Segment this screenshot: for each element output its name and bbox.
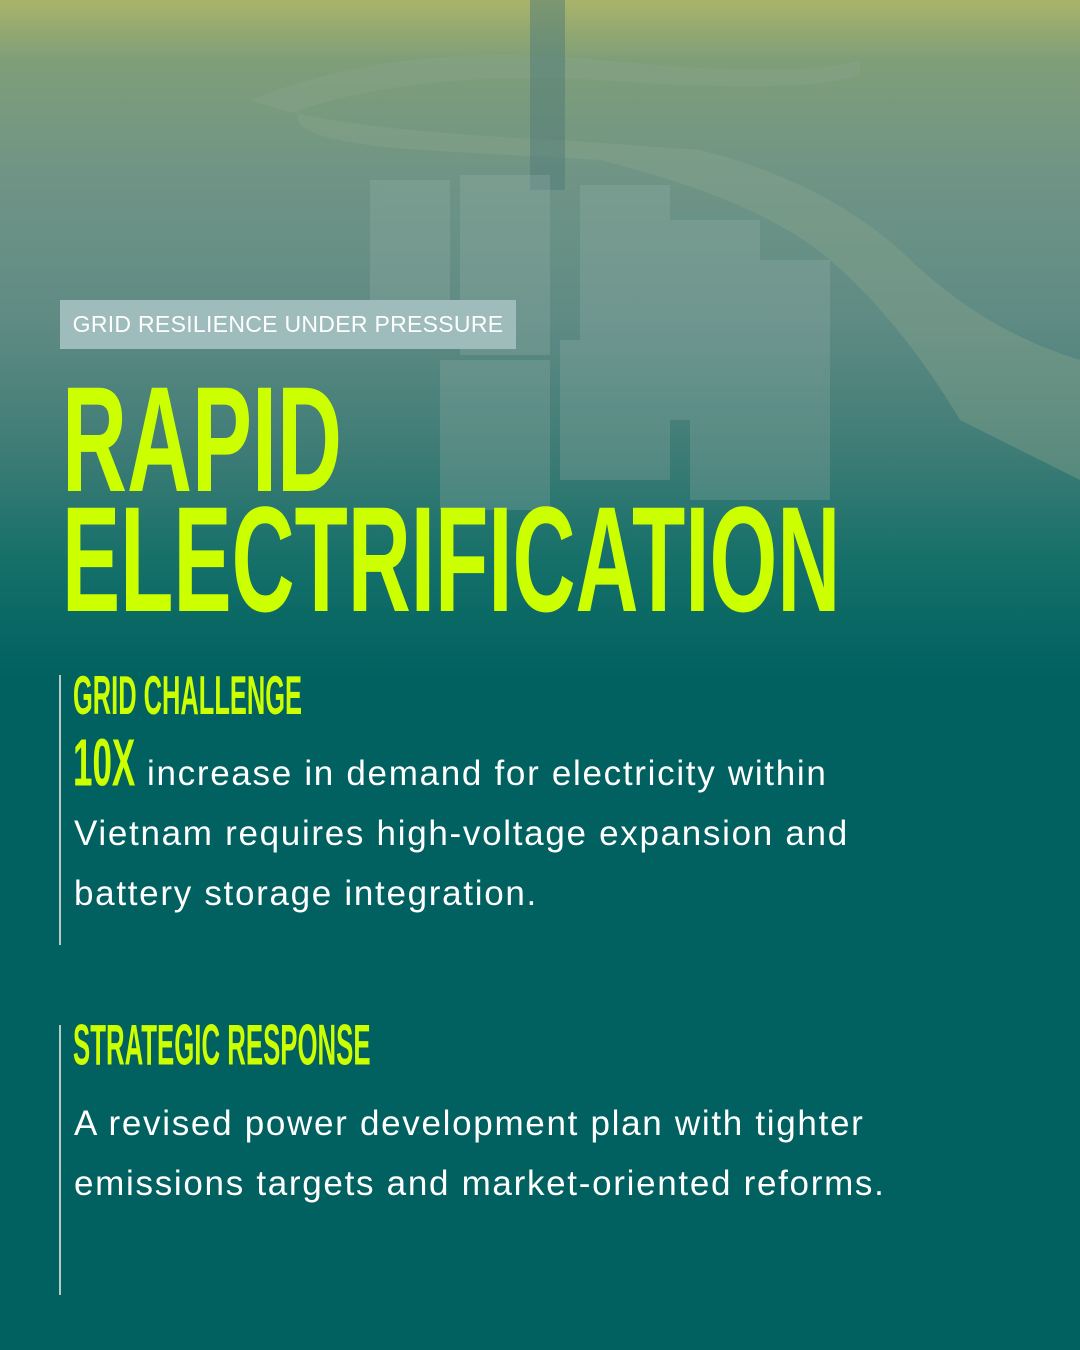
heading: strategic response: STRATEGIC RESPONSE <box>73 1013 371 1077</box>
heading: grid challenge: GRID CHALLENGE <box>73 666 302 726</box>
text: Vietnam requires high-voltage expansion and <box>74 814 849 853</box>
text: battery storage integration. <box>74 874 538 913</box>
text: emissions targets and market-oriented reforms. <box>74 1164 886 1203</box>
tag label <box>60 300 516 349</box>
body text: strategic response: A revised power development plan with tighter <box>74 1104 865 1143</box>
background photo approximation <box>0 0 1080 700</box>
body text: grid challenge: increase in demand for electricity within <box>147 754 828 793</box>
tag label: GRID RESILIENCE UNDER PRESSURE <box>73 311 503 337</box>
title line 1: RAPID <box>62 356 342 524</box>
title line 2: ELECTRIFICATION <box>62 476 840 644</box>
stat 10X: 10X <box>73 725 135 800</box>
